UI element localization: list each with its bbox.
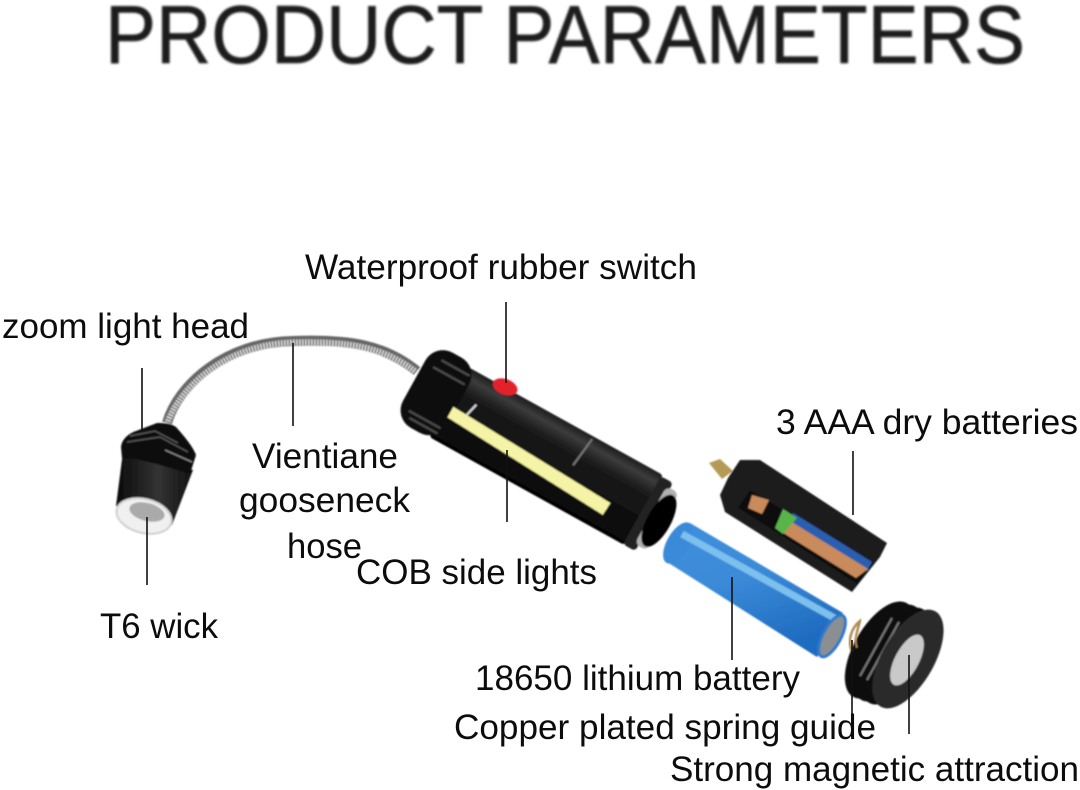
ribbed back: [830, 590, 946, 716]
copper plated spring: [850, 621, 860, 651]
label: strong magnetic attraction: Strong magnetic attraction: [670, 750, 1079, 789]
AAA battery holder: [709, 459, 887, 592]
head collar: [121, 423, 196, 474]
label: Vientiane gooseneck hose: gooseneck: [239, 481, 411, 520]
copper contact: [748, 495, 769, 514]
pointer lines: [142, 302, 909, 734]
flashlight body: [393, 343, 692, 561]
18650 lithium battery: [657, 518, 851, 661]
holder shell: [720, 460, 887, 592]
label: Vientiane gooseneck hose: [239, 437, 411, 566]
label: copper plated spring guide: Copper plated spring guide: [454, 708, 876, 747]
label: Vientiane gooseneck hose: Vientiane: [252, 437, 398, 476]
rear ribbed cap: [393, 343, 479, 442]
green cell band: [775, 509, 797, 534]
label: waterproof rubber switch: Waterproof rubber switch: [305, 248, 697, 287]
head barrel: [116, 452, 193, 525]
zoom light head: [113, 423, 196, 539]
COB strip: [443, 407, 614, 515]
tube seams: [573, 437, 592, 467]
red rubber switch: [490, 375, 520, 399]
label: T6 wick: T6 wick: [100, 607, 218, 646]
label: Vientiane gooseneck hose: hose: [287, 527, 362, 566]
lens: [113, 493, 175, 539]
label: 18650 lithium battery: 18650 lithium battery: [475, 659, 800, 698]
holder window: [738, 490, 873, 584]
label: zoom light head: zoom light head: [2, 307, 249, 346]
label: COB side lights: COB side lights: [356, 553, 597, 592]
main tube: [429, 367, 664, 545]
blue battery edge: [788, 513, 872, 571]
magnetic end cap: [830, 590, 958, 720]
battery highlight: [682, 534, 838, 620]
label: 3 AAA dry batteries: 3 AAA dry batteries: [776, 403, 1078, 442]
front face: [858, 598, 958, 720]
tube opening: [634, 490, 683, 552]
battery end cap: [813, 611, 851, 661]
gooseneck hose: [167, 341, 417, 424]
threaded end: [623, 476, 673, 551]
gold contact: [709, 459, 733, 479]
AAA cell: [780, 521, 868, 578]
magnet: [883, 630, 931, 690]
